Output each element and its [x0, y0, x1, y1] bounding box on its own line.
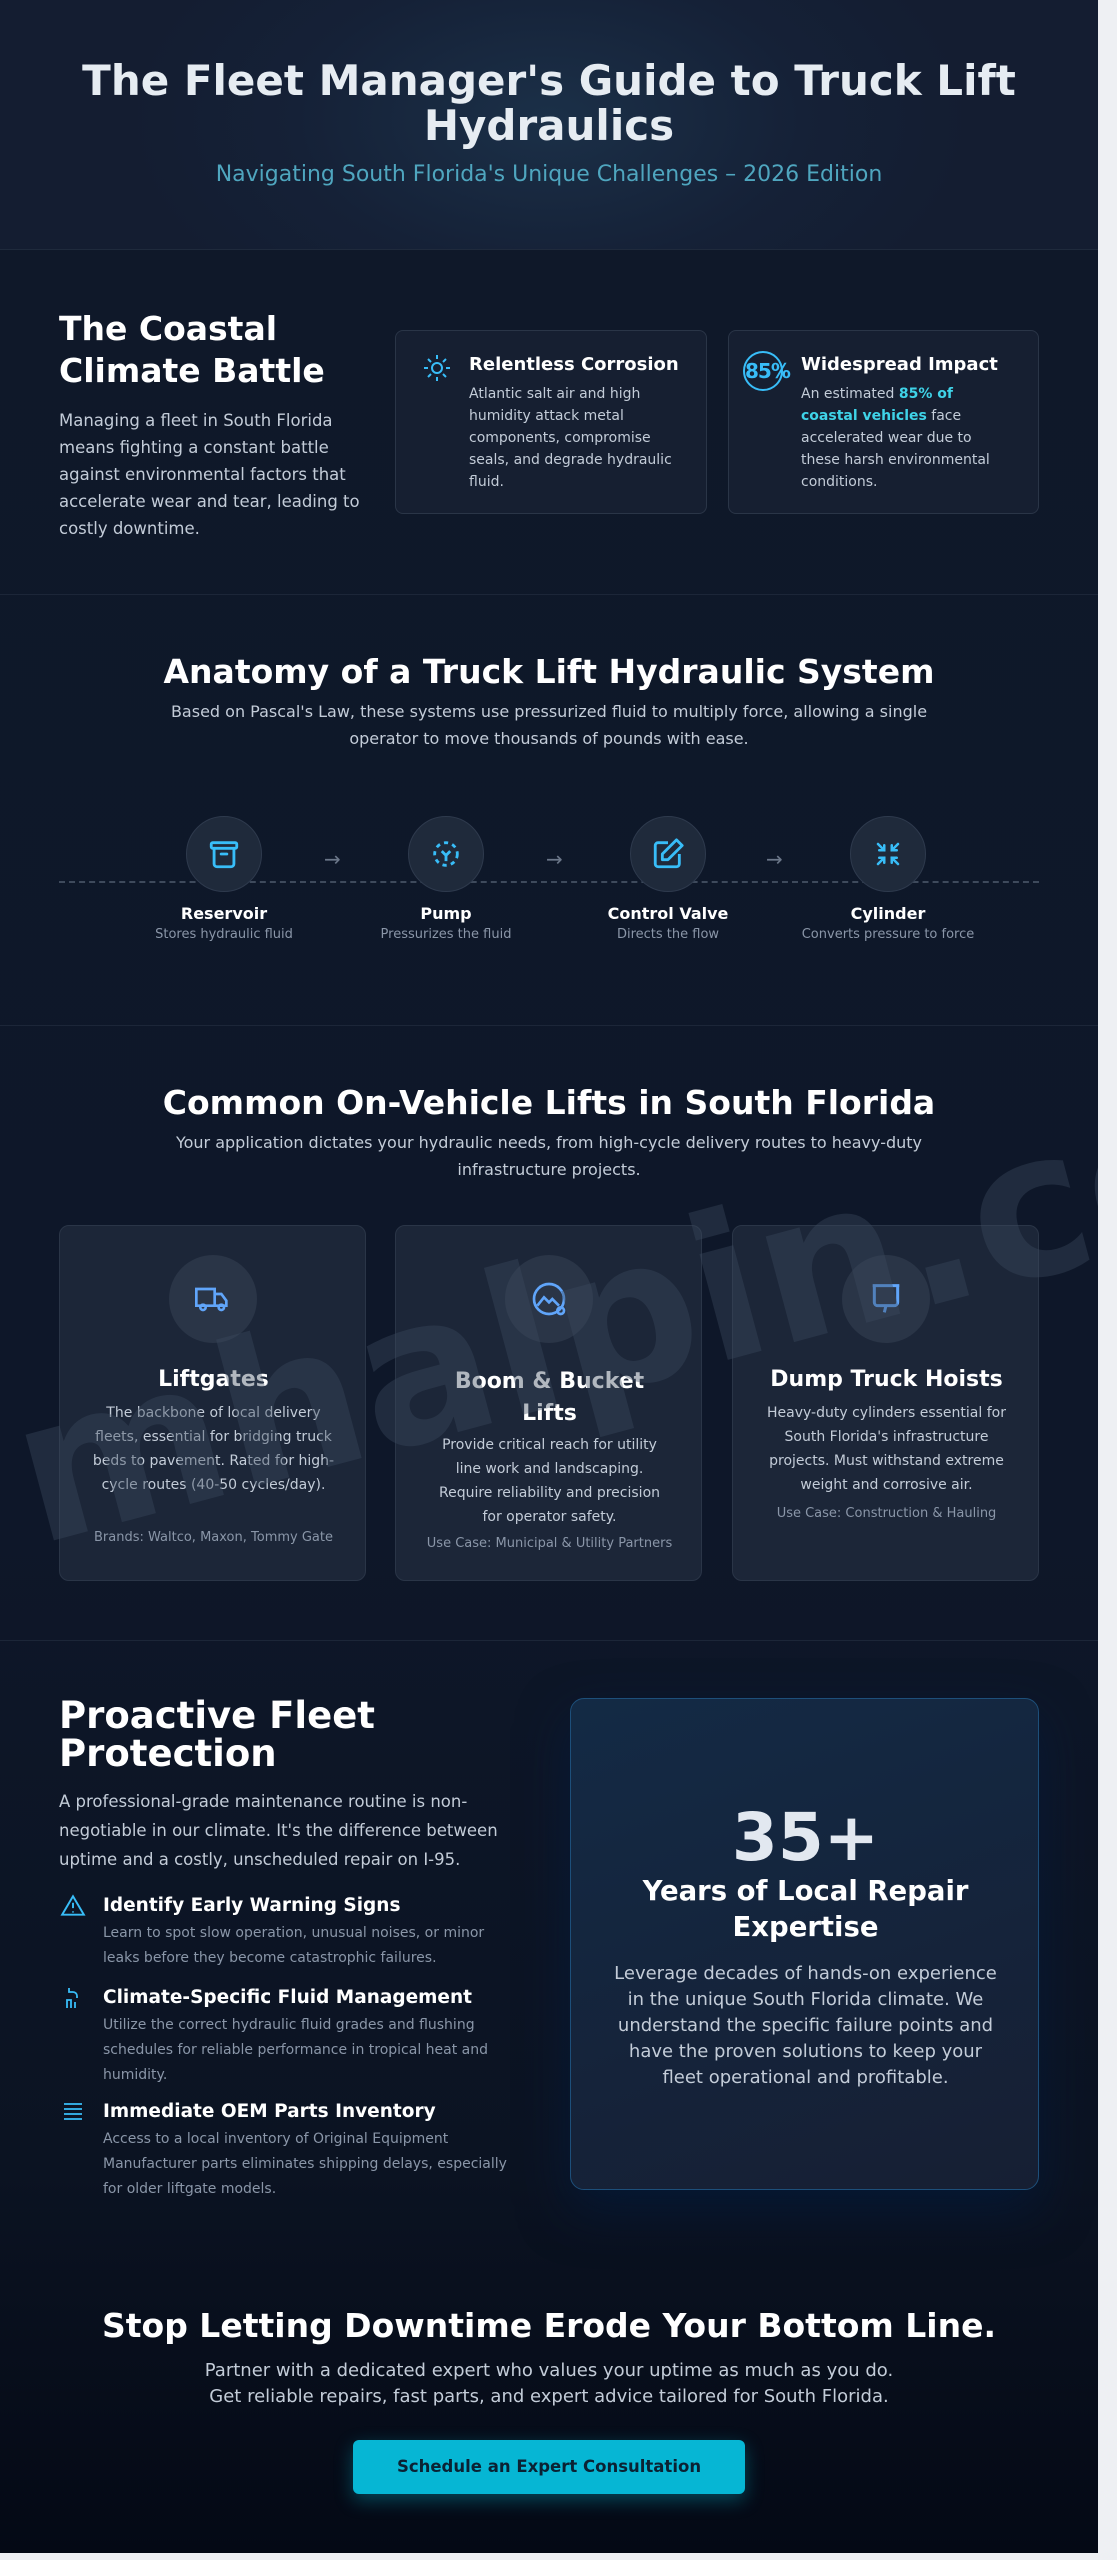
panel: lifts	[0, 1045, 1098, 1591]
card: dump: Use Case: Construction & Hauling	[777, 1506, 996, 1521]
callout: 35+ years: Leverage decades of hands-on experience in the unique South Florida climate. We understand the specific failure points and have the proven solutions to keep your fleet operational and profitable.	[614, 1963, 997, 2088]
icon: 85%	[743, 351, 783, 391]
header	[0, 0, 1098, 250]
callout: 35+ years	[570, 1698, 1039, 2190]
card: boom: Boom & Bucket	[455, 1369, 644, 1394]
step: reservoir: Stores hydraulic fluid	[155, 927, 293, 942]
heading: Stop Letting Downtime Erode Your Bottom Line.	[102, 2306, 996, 2345]
heading: Proactive Fleet	[59, 1694, 375, 1737]
card: dump	[732, 1225, 1039, 1581]
subtitle: Navigating South Florida's Unique Challenges – 2026 Edition	[216, 162, 882, 187]
card: dump: Heavy-duty cylinders essential for South Florida's infrastructure projects. Must withstand extreme weight and corrosive air.	[767, 1405, 1006, 1493]
text block: Managing a fleet in South Florida means fighting a constant battle against environmental factors that accelerate wear and tear, leading to costly downtime.	[59, 411, 360, 538]
step: cylinder: Converts pressure to force	[802, 927, 974, 942]
heading: Common On-Vehicle Lifts in South Florida	[163, 1083, 935, 1122]
card: boom	[395, 1225, 702, 1581]
heading	[59, 309, 325, 390]
step: pump: Pump	[420, 904, 472, 923]
item: parts: Access to a local inventory of Original Equipment Manufacturer parts eliminates shipping delays, especially for older liftgate models.	[103, 2131, 507, 2197]
card text: An estimated 85% of coastal vehicles face accelerated wear due to these harsh environmental conditions.	[801, 386, 990, 490]
title: The Fleet Manager's Guide to Truck Lift	[82, 56, 1016, 105]
icon: sun	[424, 355, 450, 381]
arrow: →	[766, 847, 783, 871]
card: boom: Provide critical reach for utility line work and landscaping. Require reliability and precision for operator safety.	[439, 1437, 660, 1525]
card: boom: Lifts	[522, 1401, 577, 1426]
panel: proactive	[59, 1694, 1039, 2211]
card: dump: Dump Truck Hoists	[770, 1367, 1003, 1392]
step: cylinder	[802, 816, 974, 942]
heading	[59, 1694, 375, 1775]
text block: A professional-grade maintenance routine is non-negotiable in our climate. It's the difference between uptime and a costly, unscheduled repair on I-95.	[59, 1792, 498, 1869]
item: fluid: Climate-Specific Fluid Management	[103, 1987, 472, 2008]
step: pump: Pressurizes the fluid	[381, 927, 511, 942]
card text: Atlantic salt air and high humidity attack metal components, compromise seals, and degrade hydraulic fluid.	[469, 386, 672, 490]
title	[82, 56, 1016, 150]
card: liftgates	[59, 1225, 366, 1581]
arrow: →	[546, 847, 563, 871]
step: reservoir: Reservoir	[181, 904, 267, 923]
callout: 35+ years: Expertise	[732, 1911, 878, 1943]
card title: Widespread Impact	[801, 354, 998, 375]
heading: Anatomy of a Truck Lift Hydraulic System	[164, 652, 934, 691]
title: Hydraulics	[424, 101, 674, 150]
step: control valve	[608, 816, 728, 942]
item: fluid	[66, 1987, 488, 2083]
step: reservoir	[155, 816, 293, 942]
item: warning: Learn to spot slow operation, unusual noises, or minor leaks before they become catastrophic failures.	[103, 1925, 484, 1966]
subtitle: Based on Pascal's Law, these systems use pressurized fluid to multiply force, allowing a single operator to move thousands of pounds with ease.	[171, 702, 927, 748]
card: impact	[728, 330, 1039, 514]
panel: CTA	[102, 2306, 996, 2510]
item: fluid: Utilize the correct hydraulic fluid grades and flushing schedules for reliable performance in tropical heat and humidity.	[103, 2017, 488, 2083]
card: corrosion	[395, 330, 707, 514]
heading: Climate Battle	[59, 351, 325, 390]
text block	[205, 2360, 893, 2407]
heading: Protection	[59, 1732, 277, 1775]
text block: Get reliable repairs, fast parts, and expert advice tailored for South Florida.	[209, 2386, 889, 2407]
step: control valve: Directs the flow	[617, 927, 719, 942]
step: control valve: Control Valve	[608, 904, 728, 923]
card: liftgates: Brands: Waltco, Maxon, Tommy Gate	[94, 1530, 333, 1545]
card: boom: Use Case: Municipal & Utility Partners	[427, 1536, 672, 1551]
card: liftgates: The backbone of local delivery fleets, essential for bridging truck beds to pavement. Rated for high-cycle routes (40-50 cycles/day).	[93, 1405, 334, 1493]
button	[353, 2440, 745, 2494]
callout: 35+ years: Years of Local Repair	[643, 1875, 968, 1907]
item: warning	[60, 1894, 484, 1966]
arrow: →	[324, 847, 341, 871]
card: liftgates: Liftgates	[158, 1367, 269, 1392]
heading: The Coastal	[59, 309, 277, 348]
callout: 35+ years: 35+	[732, 1799, 879, 1876]
item: warning: Identify Early Warning Signs	[103, 1895, 400, 1916]
subtitle: Your application dictates your hydraulic needs, from high-cycle delivery routes to heavy-duty infrastructure projects.	[176, 1133, 922, 1179]
button: Schedule an Expert Consultation	[397, 2457, 701, 2476]
panel: coastal climate	[59, 309, 1039, 538]
step: cylinder: Cylinder	[851, 904, 925, 923]
text block: Partner with a dedicated expert who values your uptime as much as you do.	[205, 2360, 893, 2381]
panel: anatomy	[59, 652, 1039, 942]
card title: Relentless Corrosion	[469, 354, 679, 375]
step: pump	[381, 816, 511, 942]
item: parts: Immediate OEM Parts Inventory	[103, 2101, 436, 2122]
item: parts	[64, 2101, 507, 2197]
icon: 85%: 85%	[745, 359, 790, 383]
